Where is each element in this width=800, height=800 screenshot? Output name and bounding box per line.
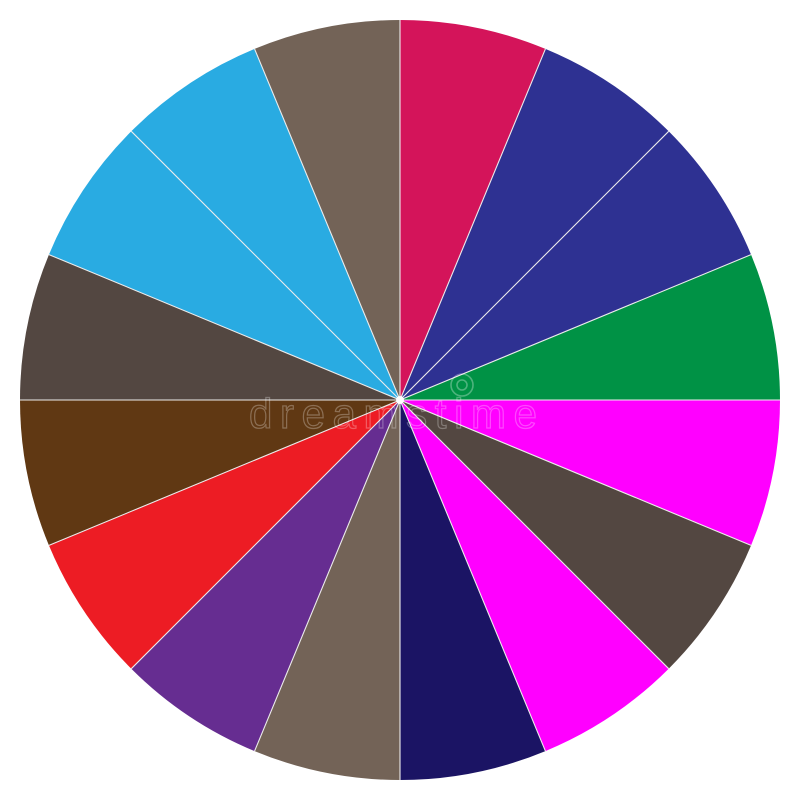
watermark text: dreamstime [249,390,537,437]
segment: dark brown 1 [400,400,751,669]
watermark icon: spiral [451,374,473,396]
segment: purple [131,400,400,751]
segment: dark brown 2 [20,255,400,400]
segment: brown [20,400,400,545]
segment: magenta 2 [400,400,669,751]
segment: sky blue 2 [131,49,400,400]
segment: indigo 2 [400,131,751,400]
segment: taupe 1 [255,400,400,780]
segment: magenta 1 [400,400,780,545]
segment: indigo 1 [400,49,669,400]
segment: red [49,400,400,669]
segment: dark navy [400,400,545,780]
segment: taupe 2 [255,20,400,400]
segment: sky blue 1 [49,131,400,400]
segment: green [400,255,780,400]
center point [396,396,404,404]
segment: crimson [400,20,545,400]
